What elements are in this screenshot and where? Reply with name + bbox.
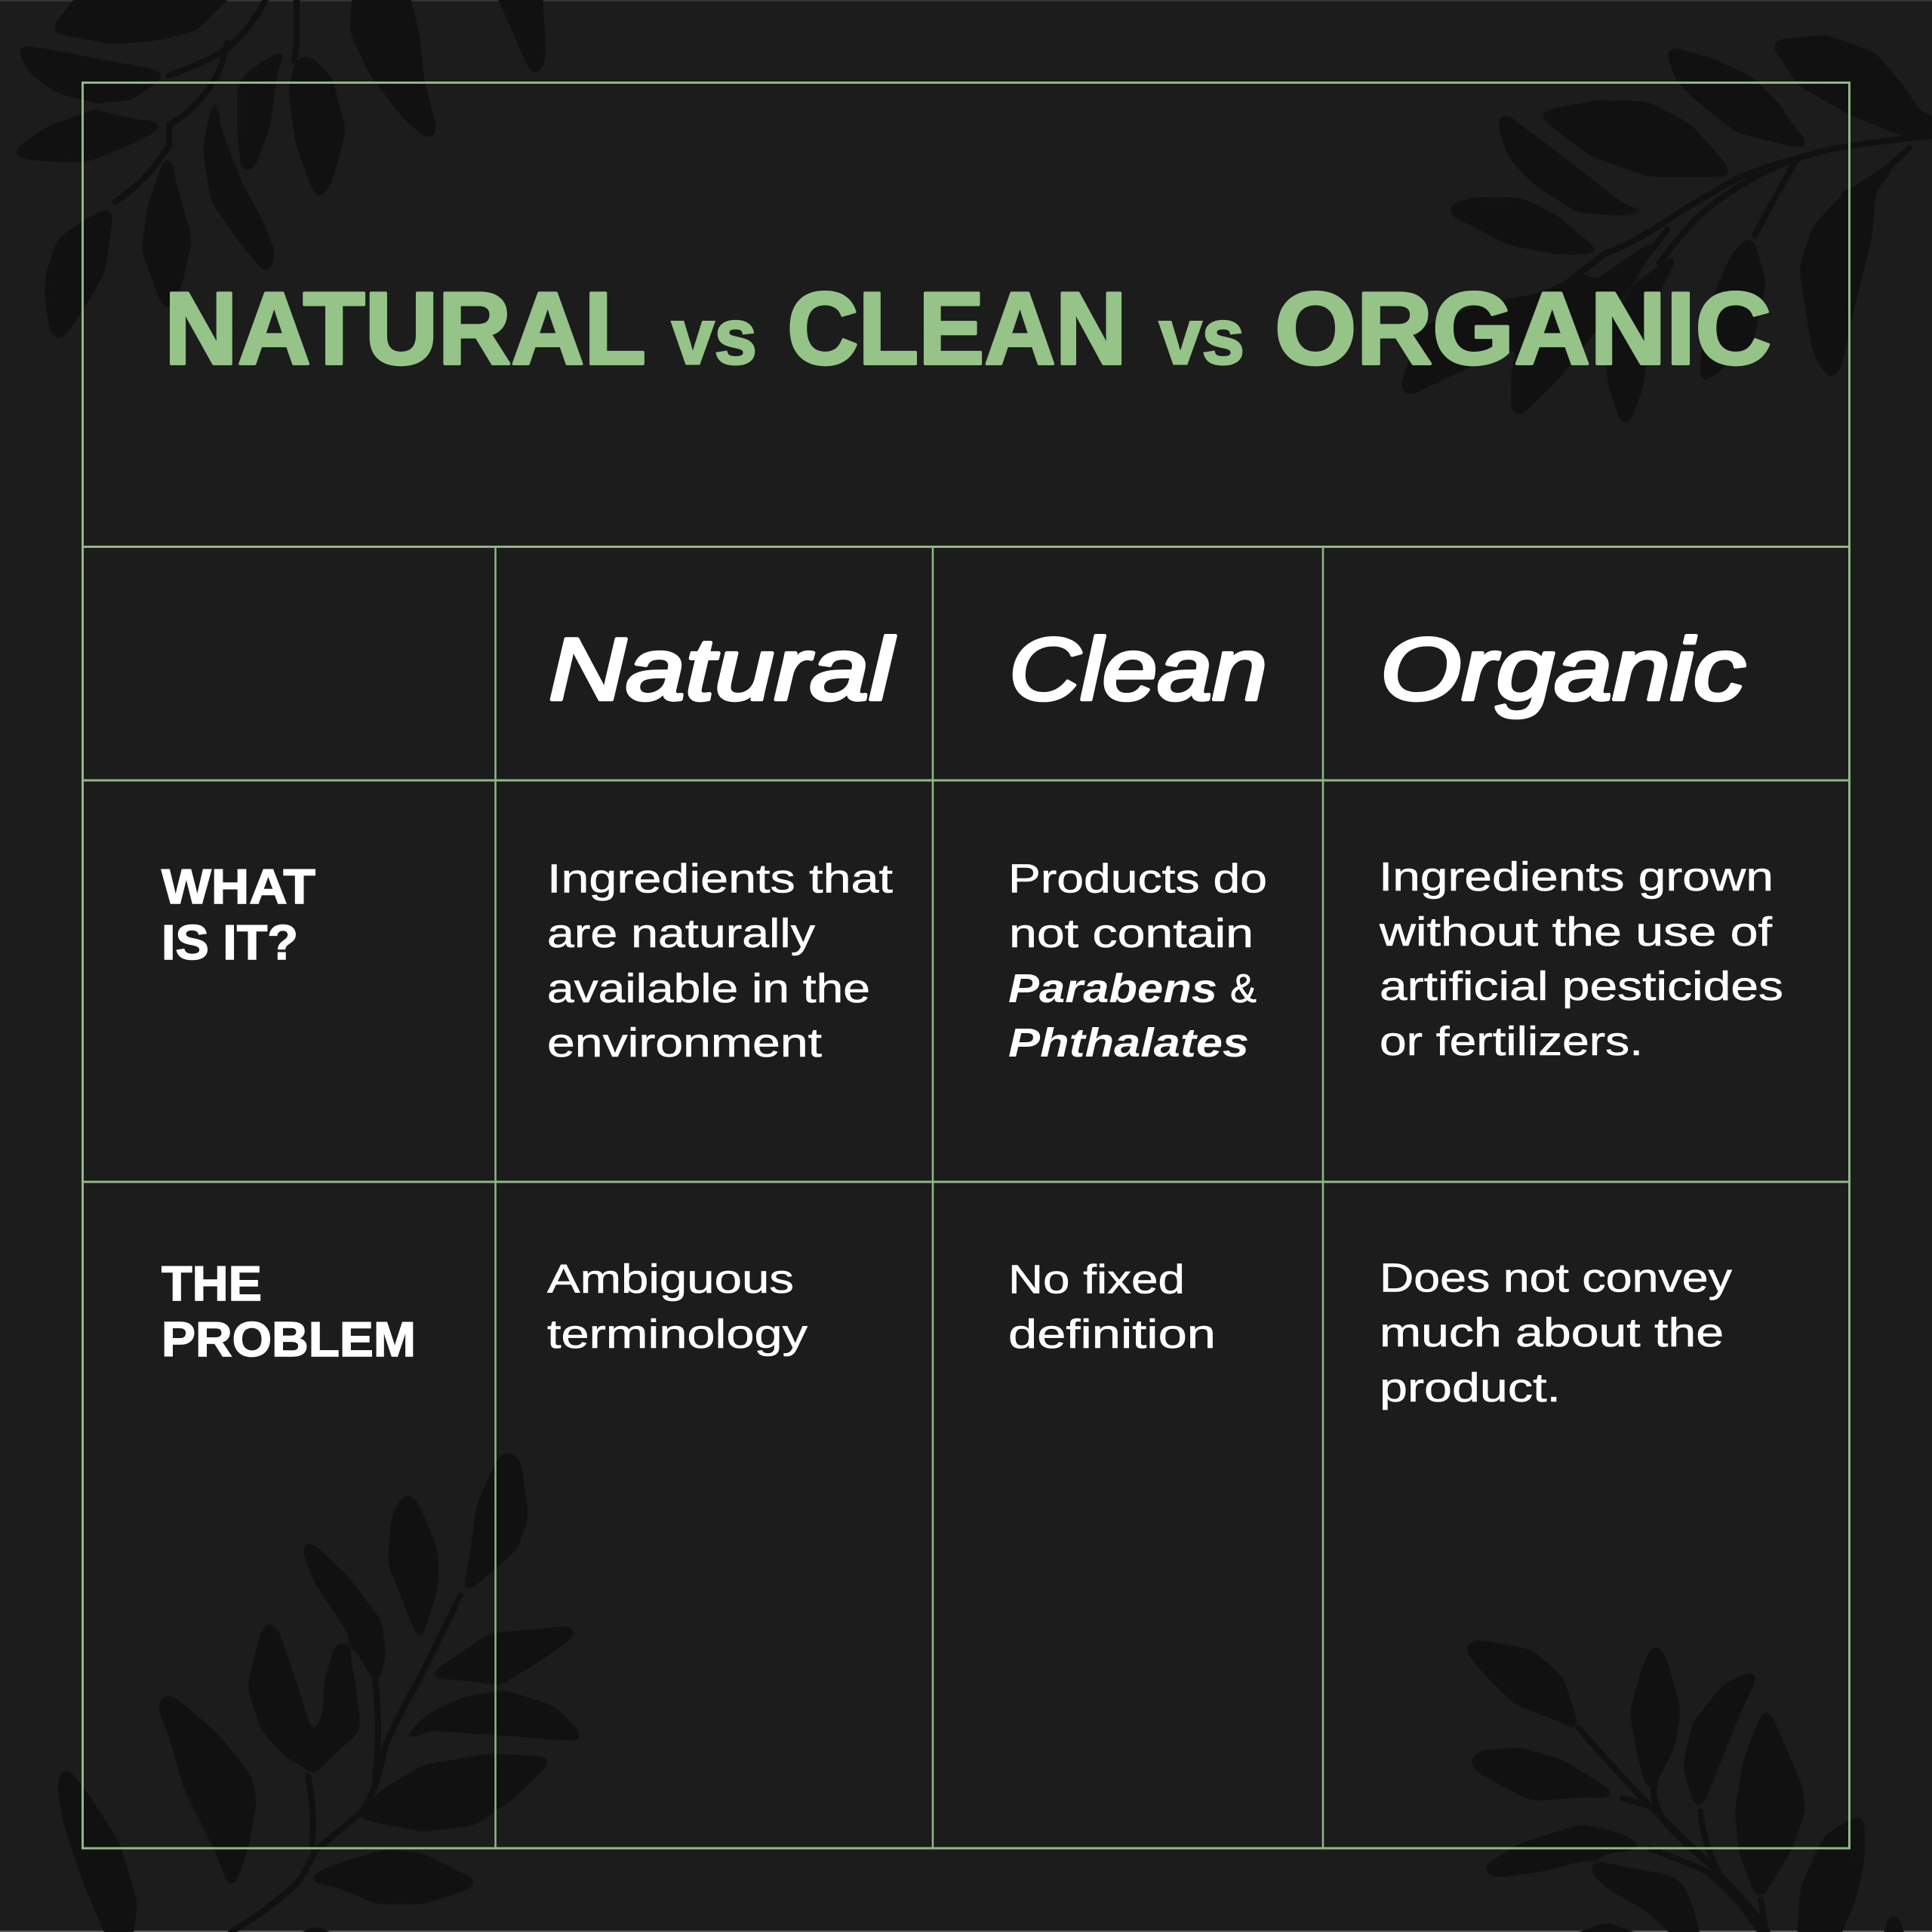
definition: organic: artificial pesticides xyxy=(1380,964,1783,1009)
row label: what is it: IS IT? xyxy=(162,915,298,970)
definition: natural: available in the xyxy=(547,966,870,1011)
problem: organic: much about the xyxy=(1380,1310,1724,1355)
row label: the problem: THE xyxy=(162,1256,262,1311)
column heading: Organic: Organic xyxy=(1380,620,1746,718)
row label: the problem xyxy=(162,1256,416,1367)
foliage: bottom-right branch xyxy=(1463,1641,1906,1932)
problem: clean xyxy=(1008,1257,1216,1357)
definition: organic: Ingredients grown xyxy=(1379,854,1774,900)
definition: natural: environment xyxy=(547,1020,822,1066)
definition: organic xyxy=(1379,854,1783,1064)
problem: organic: Does not convey xyxy=(1380,1256,1732,1301)
definition: clean: not contain xyxy=(1009,911,1254,956)
title: CLEAN xyxy=(787,271,1127,386)
column heading: Clean: Clean xyxy=(1009,620,1267,718)
column heading: Natural: Natural xyxy=(549,620,896,718)
definition: natural xyxy=(547,856,893,1066)
foliage: bottom-left branch xyxy=(58,1451,587,1932)
row label: what is it xyxy=(162,859,315,970)
title xyxy=(165,271,1771,386)
row label: the problem: PROBLEM xyxy=(162,1312,416,1367)
problem: natural: terminology xyxy=(547,1312,808,1357)
definition: clean xyxy=(1008,856,1267,1066)
foliage: top-right branch xyxy=(1401,35,1932,432)
definition: clean: Parabens xyxy=(1008,966,1217,1011)
definition: natural: are naturally xyxy=(547,911,815,956)
definition: clean: & xyxy=(1230,966,1257,1011)
problem: natural: Ambiguous xyxy=(547,1257,794,1302)
definition: organic: without the use of xyxy=(1379,909,1773,955)
definition: clean: Phthalates xyxy=(1008,1020,1249,1066)
problem: clean: No fixed xyxy=(1008,1257,1185,1303)
title: NATURAL xyxy=(165,271,646,386)
title: vs xyxy=(1159,293,1244,381)
definition: natural: Ingredients that xyxy=(547,856,893,901)
problem: organic: product. xyxy=(1380,1365,1561,1411)
title: vs xyxy=(672,293,757,381)
problem: natural xyxy=(547,1257,808,1357)
definition: organic: or fertilizers. xyxy=(1380,1019,1643,1064)
title: ORGANIC xyxy=(1275,271,1771,386)
row label: what is it: WHAT xyxy=(162,859,315,914)
foliage: top-left branch xyxy=(11,0,545,340)
problem: organic xyxy=(1380,1256,1732,1411)
definition: clean: Products do xyxy=(1008,856,1267,901)
problem: clean: definition xyxy=(1008,1312,1216,1357)
